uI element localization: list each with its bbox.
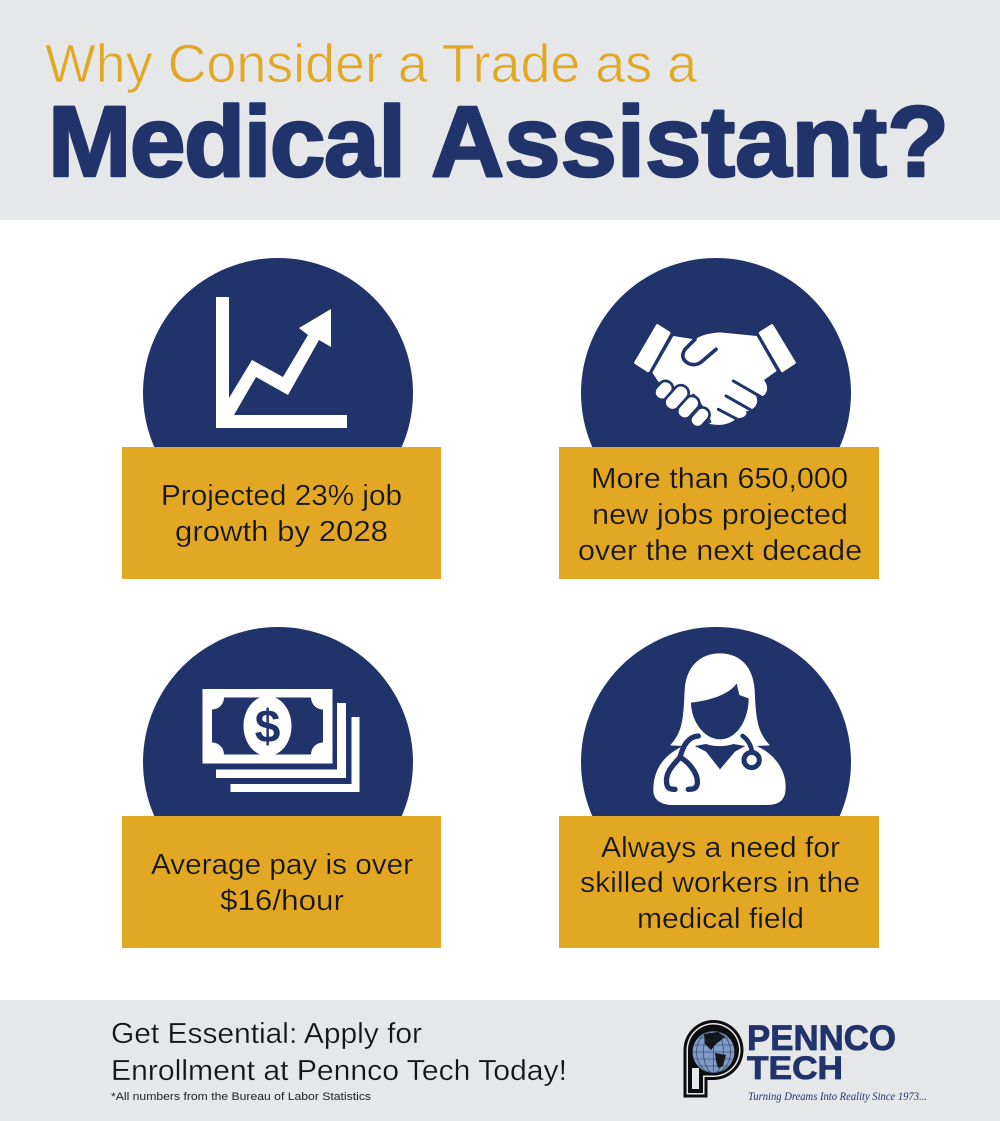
caption: new jobs: over the next decade [578, 535, 862, 567]
header band [0, 0, 1000, 220]
panel: average pay [122, 627, 441, 948]
icon: stack of money [202, 689, 360, 792]
caption: average pay [151, 849, 413, 917]
caption: average pay: Average pay is over [151, 849, 413, 881]
call to action [111, 1018, 567, 1087]
panel: job growth [122, 258, 441, 579]
caption: average pay: $16/hour [220, 885, 344, 917]
caption: new jobs [578, 463, 862, 567]
logo wordmark [747, 1019, 896, 1086]
icon: growth chart [216, 297, 347, 428]
caption: skilled workers: Always a need for [601, 832, 840, 864]
logo wordmark: PENNCO [747, 1019, 896, 1058]
title line 2 [48, 86, 949, 198]
title line 2: Medical [48, 86, 406, 198]
caption: job growth [161, 480, 402, 548]
logo tagline: Turning Dreams Into Reality Since 1973... [748, 1089, 927, 1103]
caption: skilled workers [580, 832, 860, 935]
panel: skilled workers [559, 627, 879, 948]
caption: new jobs: new jobs projected [592, 499, 848, 531]
icon: stack of money: $ [255, 700, 280, 752]
call to action: Enrollment at Pennco Tech Today! [111, 1055, 567, 1087]
logo: Pennco Tech [684, 1019, 927, 1103]
caption: job growth: growth by 2028 [175, 516, 388, 548]
logo wordmark: TECH [747, 1050, 843, 1086]
title line 2: Assistant? [431, 86, 949, 198]
footer band [0, 1000, 1000, 1121]
icon: P with globe [684, 1020, 744, 1098]
footnote: *All numbers from the Bureau of Labor Statistics [111, 1091, 372, 1103]
panel: new jobs [559, 258, 879, 579]
caption: skilled workers: skilled workers in the [580, 867, 860, 899]
caption: new jobs: More than 650,000 [591, 463, 848, 495]
call to action: Get Essential: Apply for [111, 1018, 422, 1050]
icon: doctor with stethoscope [653, 653, 786, 805]
caption: skilled workers: medical field [637, 903, 804, 935]
icon: handshake [636, 326, 794, 430]
caption: job growth: Projected 23% job [161, 480, 402, 512]
title line 1: Why Consider a Trade as a [45, 34, 698, 94]
